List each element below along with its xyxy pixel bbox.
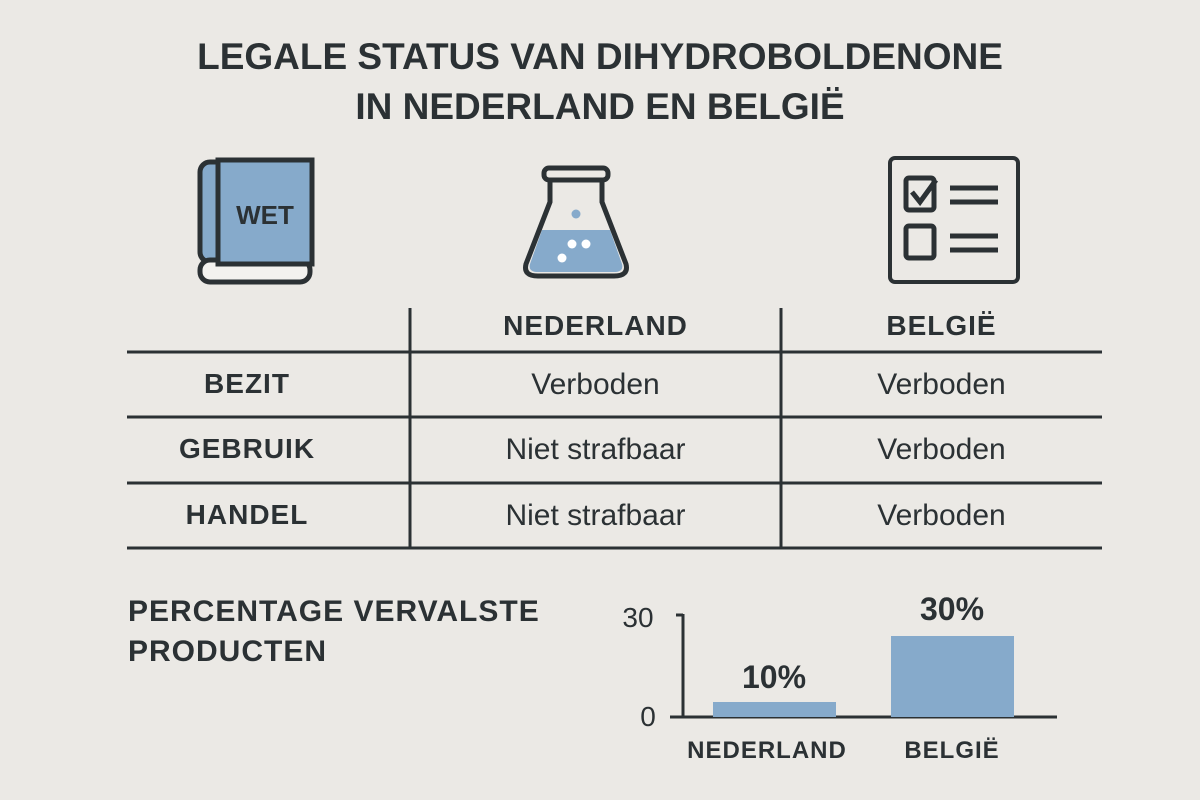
icon: flask: [523, 166, 629, 278]
chart heading: [128, 595, 540, 668]
bar chart: [622, 591, 1057, 764]
bar chart: BELGIË: [904, 737, 1000, 764]
row: bezit: Verboden: [877, 368, 1006, 401]
bar chart: 0: [640, 701, 656, 732]
row: bezit: Verboden: [531, 368, 660, 401]
row: gebruik: Verboden: [877, 433, 1006, 466]
header: Nederland: NEDERLAND: [503, 310, 688, 341]
bar chart: 30: [622, 602, 654, 633]
row: gebruik: [179, 433, 1006, 466]
row: bezit: [204, 368, 1006, 401]
title: [197, 36, 1003, 127]
row: bezit: BEZIT: [204, 368, 290, 399]
row: gebruik: Niet strafbaar: [505, 433, 686, 466]
header: België: BELGIË: [886, 310, 997, 341]
row: handel: Verboden: [877, 499, 1006, 532]
title: LEGALE STATUS VAN DIHYDROBOLDENONE: [197, 36, 1003, 77]
chart heading: PERCENTAGE VERVALSTE: [128, 595, 540, 628]
icon: law book: [198, 158, 314, 284]
row: handel: HANDEL: [186, 499, 308, 530]
chart heading: PRODUCTEN: [128, 635, 327, 668]
bar chart: 30%: [920, 591, 984, 627]
bar chart: 10%: [742, 659, 806, 695]
row: handel: [186, 499, 1006, 532]
row: handel: Niet strafbaar: [505, 499, 686, 532]
table: [127, 308, 1102, 550]
bar chart: NEDERLAND: [687, 737, 847, 764]
row: gebruik: GEBRUIK: [179, 433, 315, 464]
icon: checklist: [888, 156, 1020, 284]
icon: law book: WET: [236, 200, 294, 230]
title: IN NEDERLAND EN BELGIË: [355, 86, 845, 127]
